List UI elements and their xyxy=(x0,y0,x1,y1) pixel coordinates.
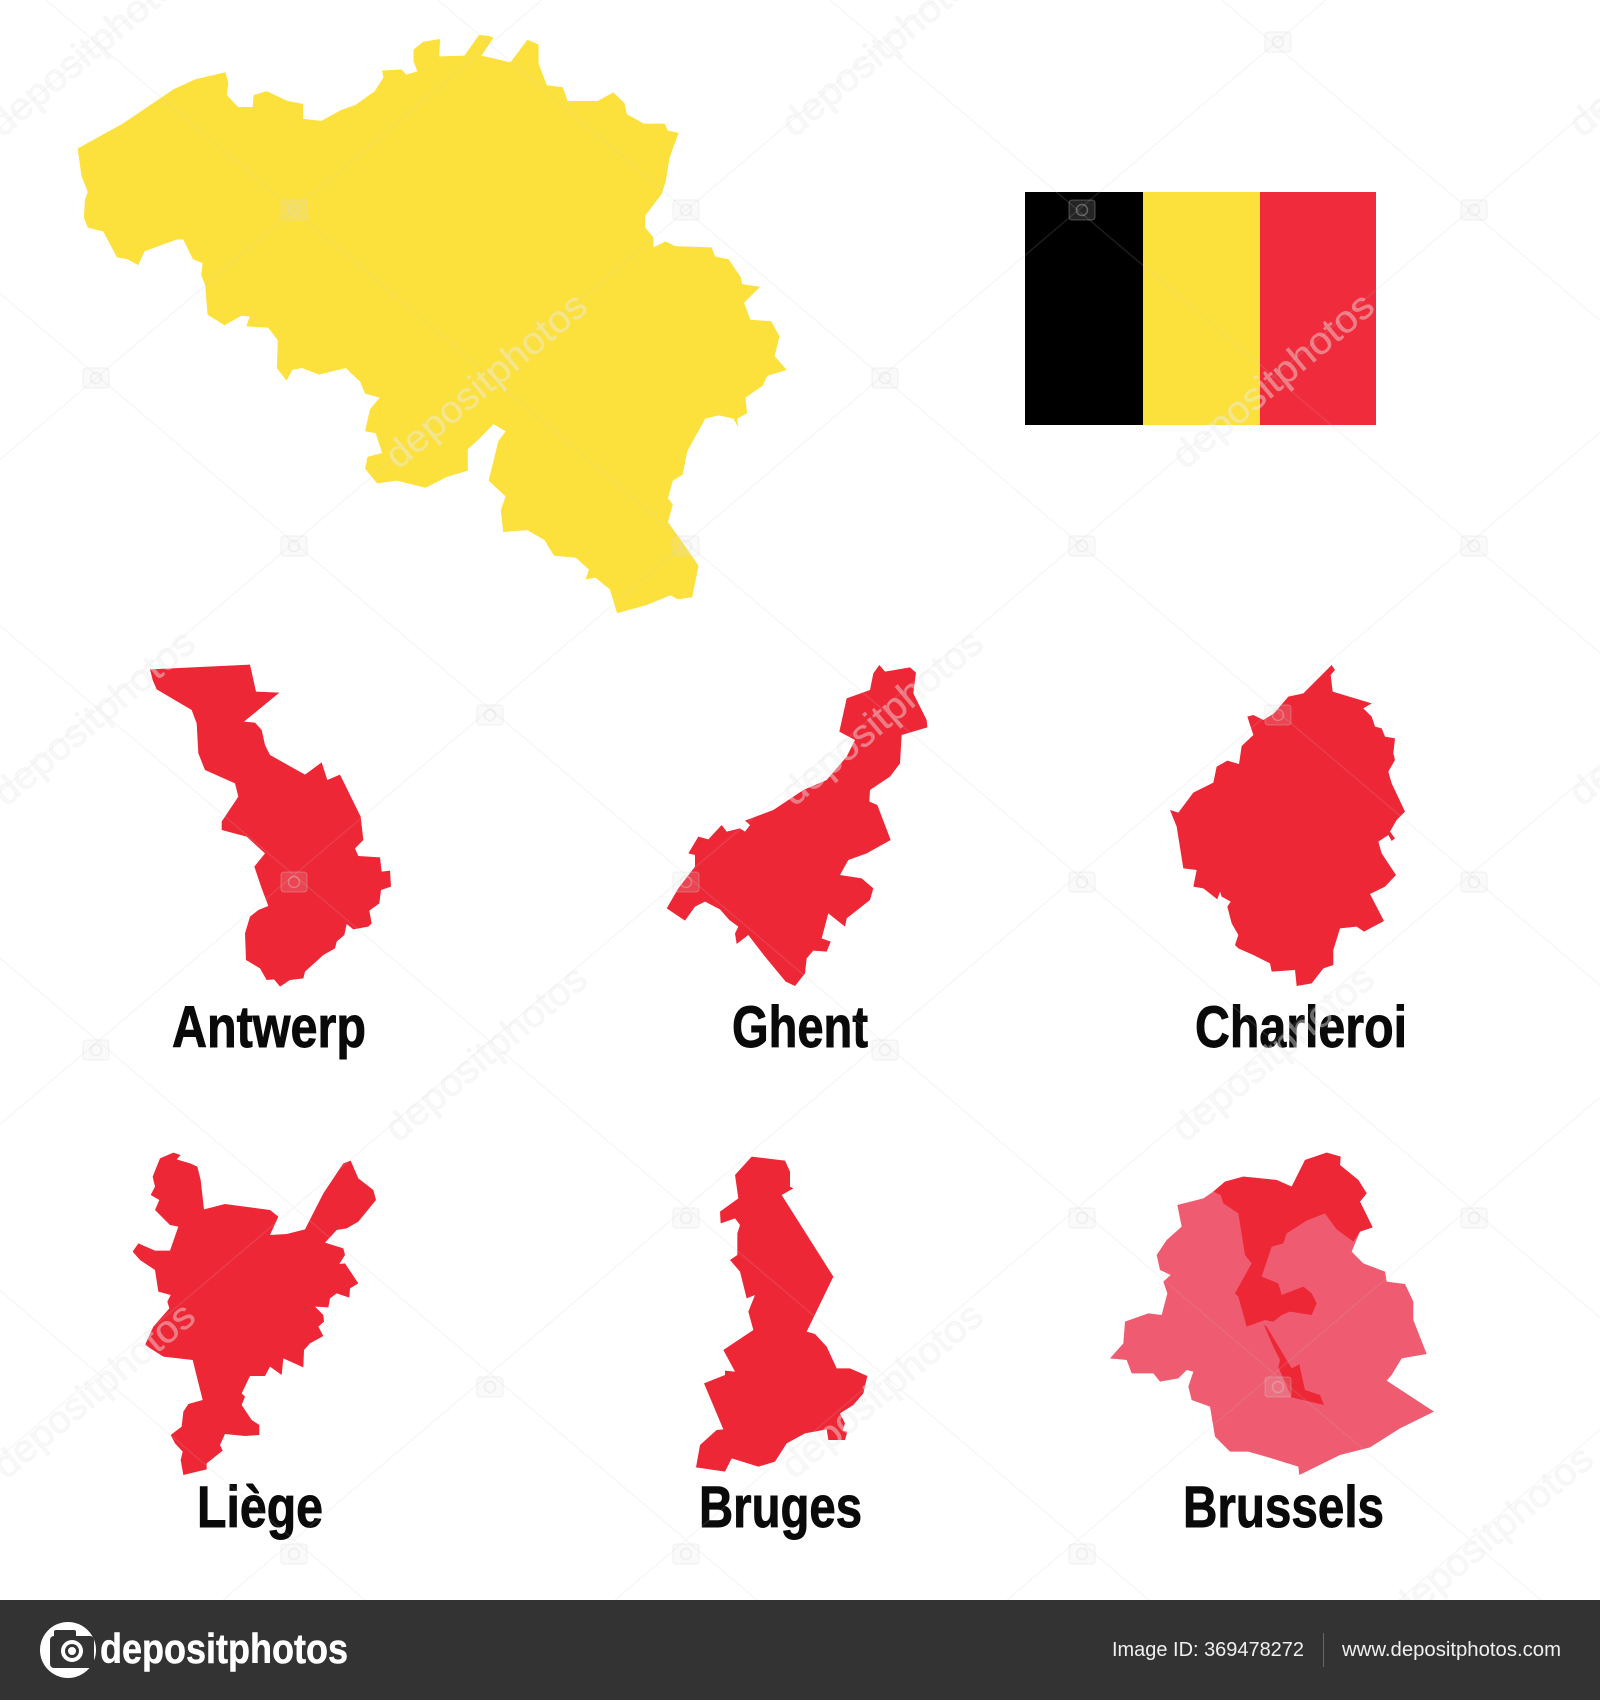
footer bar xyxy=(0,1600,1600,1700)
map: Antwerp xyxy=(150,665,391,987)
watermark overlay: depositphotos xyxy=(1383,1437,1600,1630)
footer website: www.depositphotos.com xyxy=(1341,1639,1561,1661)
watermark overlay: depositphotos xyxy=(377,284,596,477)
map: Liège xyxy=(133,1153,376,1475)
map: Charleroi xyxy=(1170,665,1405,986)
label: Bruges: Bruges xyxy=(699,1475,862,1540)
watermark overlay: depositphotos xyxy=(1164,284,1383,477)
icon: depositphotos camera logo xyxy=(40,1622,96,1678)
label: Brussels: Brussels xyxy=(1183,1475,1384,1540)
label: Ghent: Ghent xyxy=(732,995,868,1060)
map: Brussels xyxy=(1110,1153,1434,1475)
label: Antwerp: Antwerp xyxy=(172,995,366,1060)
label: Charleroi: Charleroi xyxy=(1195,995,1407,1060)
watermark overlay: depositphotos xyxy=(377,957,596,1150)
watermark overlay: depositphotos xyxy=(773,1294,992,1487)
label: Liège: Liège xyxy=(197,1475,323,1540)
map: Ghent xyxy=(667,665,927,986)
flag of Belgium xyxy=(1025,192,1376,425)
map: Belgium silhouette xyxy=(78,35,787,613)
watermark overlay: depositphotos xyxy=(1164,957,1383,1150)
footer image id: Image ID: 369478272 xyxy=(1112,1639,1304,1661)
footer logo wordmark: depositphotos xyxy=(100,1625,348,1672)
watermark overlay: depositphotos xyxy=(773,621,992,814)
map: Bruges xyxy=(696,1157,867,1472)
